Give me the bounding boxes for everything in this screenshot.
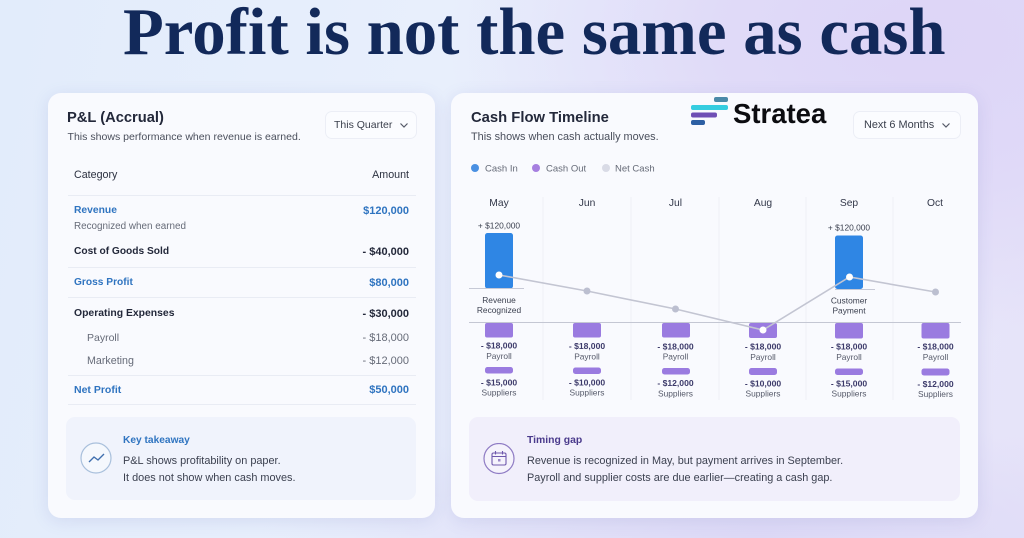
supplier labels: - $12,000 [657,378,694,388]
subtitle: cash flow: This shows when cash actually moves. [471,131,659,143]
callout text: P&L: P&L shows profitability on paper. [123,455,281,467]
cash in labels: Recognized [477,305,521,315]
payroll labels: - $18,000 [917,342,954,352]
payroll labels: - $18,000 [481,340,517,350]
logo wordmark: Stratea [733,98,826,129]
month labels: May [489,198,510,209]
payroll labels: Payroll [923,352,948,362]
value: gross profit: $80,000 [369,277,409,289]
row: payroll: Payroll [87,332,119,344]
supplier labels: - $10,000 [569,378,605,388]
row: revenue: Revenue [74,205,117,216]
supplier labels: Suppliers [658,388,693,398]
panel: P&L accrual [48,93,435,518]
icon: trend line [80,442,112,474]
legend [471,164,655,174]
dropdown: next 6 months [853,111,961,139]
payroll labels: - $18,000 [657,342,694,352]
note: recognized when earned: Recognized when earned [74,221,186,232]
month labels: Jul [669,198,682,209]
net cash line [496,272,939,334]
value: marketing: - $12,000 [363,355,409,367]
payroll labels: Payroll [486,351,512,361]
payroll labels: - $18,000 [569,341,605,351]
callout: timing gap [469,417,960,501]
axis [469,322,961,324]
dropdown: next 6 months: Next 6 Months [864,119,934,131]
payroll labels: Payroll [750,352,776,362]
payroll labels: - $18,000 [745,342,781,352]
legend: Net Cash [615,164,655,174]
cash in bars [485,233,863,289]
month labels: Jun [579,198,596,209]
callout heading: timing gap: Timing gap [527,435,582,446]
cash in labels: + $120,000 [478,220,520,230]
supplier labels: Suppliers [482,388,516,398]
row: gross profit: Gross Profit [74,277,133,288]
callout text: P&L [123,455,296,484]
value: payroll: - $18,000 [363,332,409,344]
table header: amount: Amount [372,169,409,181]
month labels [489,198,943,209]
month labels: Sep [840,198,858,209]
payroll labels: Payroll [663,352,688,362]
payroll labels: Payroll [836,352,862,362]
value: revenue: $120,000 [363,205,409,217]
supplier labels: - $15,000 [481,378,517,388]
month labels: Aug [754,198,772,209]
callout: key takeaway [66,417,416,500]
value: cost of goods sold: - $40,000 [363,246,409,258]
dropdown: this quarter [325,111,417,139]
payroll labels: Payroll [574,352,600,362]
cash in labels: Revenue [482,295,516,305]
heading: cash flow: Cash Flow Timeline [471,110,609,126]
legend: Cash In [485,164,518,174]
supplier labels: Suppliers [746,388,780,398]
callout text: timing gap [527,455,843,484]
cash in labels: Customer [831,296,867,306]
callout text: timing gap: Payroll and supplier costs are due earlier—creating a cash gap. [527,472,832,484]
supplier labels: Suppliers [918,389,953,399]
callout text: P&L: It does not show when cash moves. [123,472,296,484]
heading: P&L: P&L (Accrual) [67,110,164,126]
value: net profit: $50,000 [369,384,409,396]
supplier labels: - $10,000 [745,378,781,388]
payroll labels [481,340,954,362]
subtitle: P&L: This shows performance when revenue is earned. [68,131,301,143]
payroll bars [485,323,950,338]
logo mark [691,97,728,125]
supplier labels: Suppliers [570,388,604,398]
logo: stratea [691,97,826,129]
supplier bars [485,367,950,376]
supplier labels [481,378,954,399]
dropdown: this quarter: This Quarter [334,119,392,131]
cash in labels [477,220,870,316]
value: operating expenses: - $30,000 [363,308,409,320]
cash in labels: Payment [832,306,866,316]
table header: category: Category [74,169,117,181]
row: cost of goods sold: Cost of Goods Sold [74,246,169,257]
supplier labels: - $15,000 [831,378,867,388]
supplier labels: - $12,000 [917,379,954,389]
legend: Cash Out [546,164,586,174]
row: operating expenses: Operating Expenses [74,308,174,319]
payroll labels: - $18,000 [831,342,867,352]
supplier labels: Suppliers [832,388,866,398]
month labels: Oct [927,198,943,209]
callout heading: key takeaway: Key takeaway [123,435,190,446]
row: net profit: Net Profit [74,384,121,396]
panel: cash flow timeline [451,93,978,518]
cash in labels: + $120,000 [828,222,870,232]
icon: calendar [483,443,515,474]
row: marketing: Marketing [87,355,134,367]
callout text: timing gap: Revenue is recognized in May, but payment arrives in September. [527,455,843,467]
